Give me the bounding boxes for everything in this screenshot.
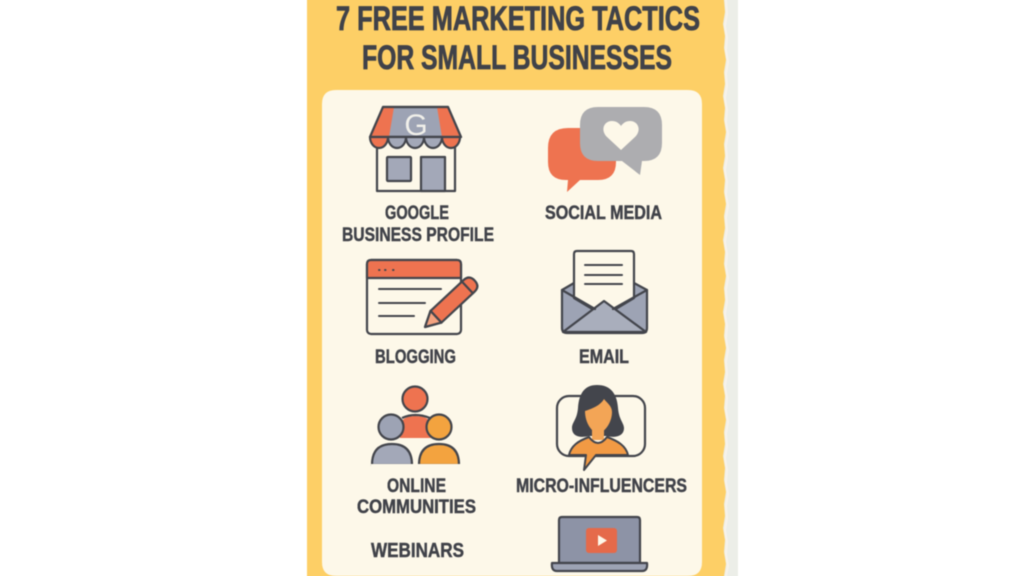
icon: micro-influencer video bubble <box>557 385 645 470</box>
paper edge strip <box>720 0 738 576</box>
icon: storefront with Google awning: G <box>404 109 428 142</box>
label: Webinars: WEBINARS <box>371 540 464 562</box>
icon: social media chat bubbles <box>548 107 662 192</box>
icon: storefront with Google awning <box>370 107 461 191</box>
label: Micro-Influencers: MICRO-INFLUENCERS <box>516 476 687 497</box>
label: Online Communities: ONLINE <box>387 476 446 497</box>
icon: envelope with letter <box>562 251 647 333</box>
yellow background panel <box>307 0 726 576</box>
title <box>336 0 700 77</box>
title: FOR SMALL BUSINESSES <box>362 39 672 77</box>
label: Social Media: SOCIAL MEDIA <box>545 203 662 224</box>
label: Google Business Profile: BUSINESS PROFILE <box>342 225 494 246</box>
icon: online community people <box>371 386 461 467</box>
torn paper fringe <box>725 0 728 576</box>
title: 7 FREE MARKETING TACTICS <box>336 0 700 38</box>
label: Online Communities: COMMUNITIES <box>357 497 476 518</box>
label: Blogging: BLOGGING <box>375 347 456 368</box>
panel: tactics card <box>322 90 702 576</box>
icon: blog window with pencil <box>367 260 480 334</box>
label: Online Communities <box>357 476 476 518</box>
label: Email: EMAIL <box>579 347 629 368</box>
icon: laptop with video play button <box>552 517 647 571</box>
label: Google Business Profile: GOOGLE <box>385 203 449 224</box>
label: Google Business Profile <box>342 203 494 246</box>
